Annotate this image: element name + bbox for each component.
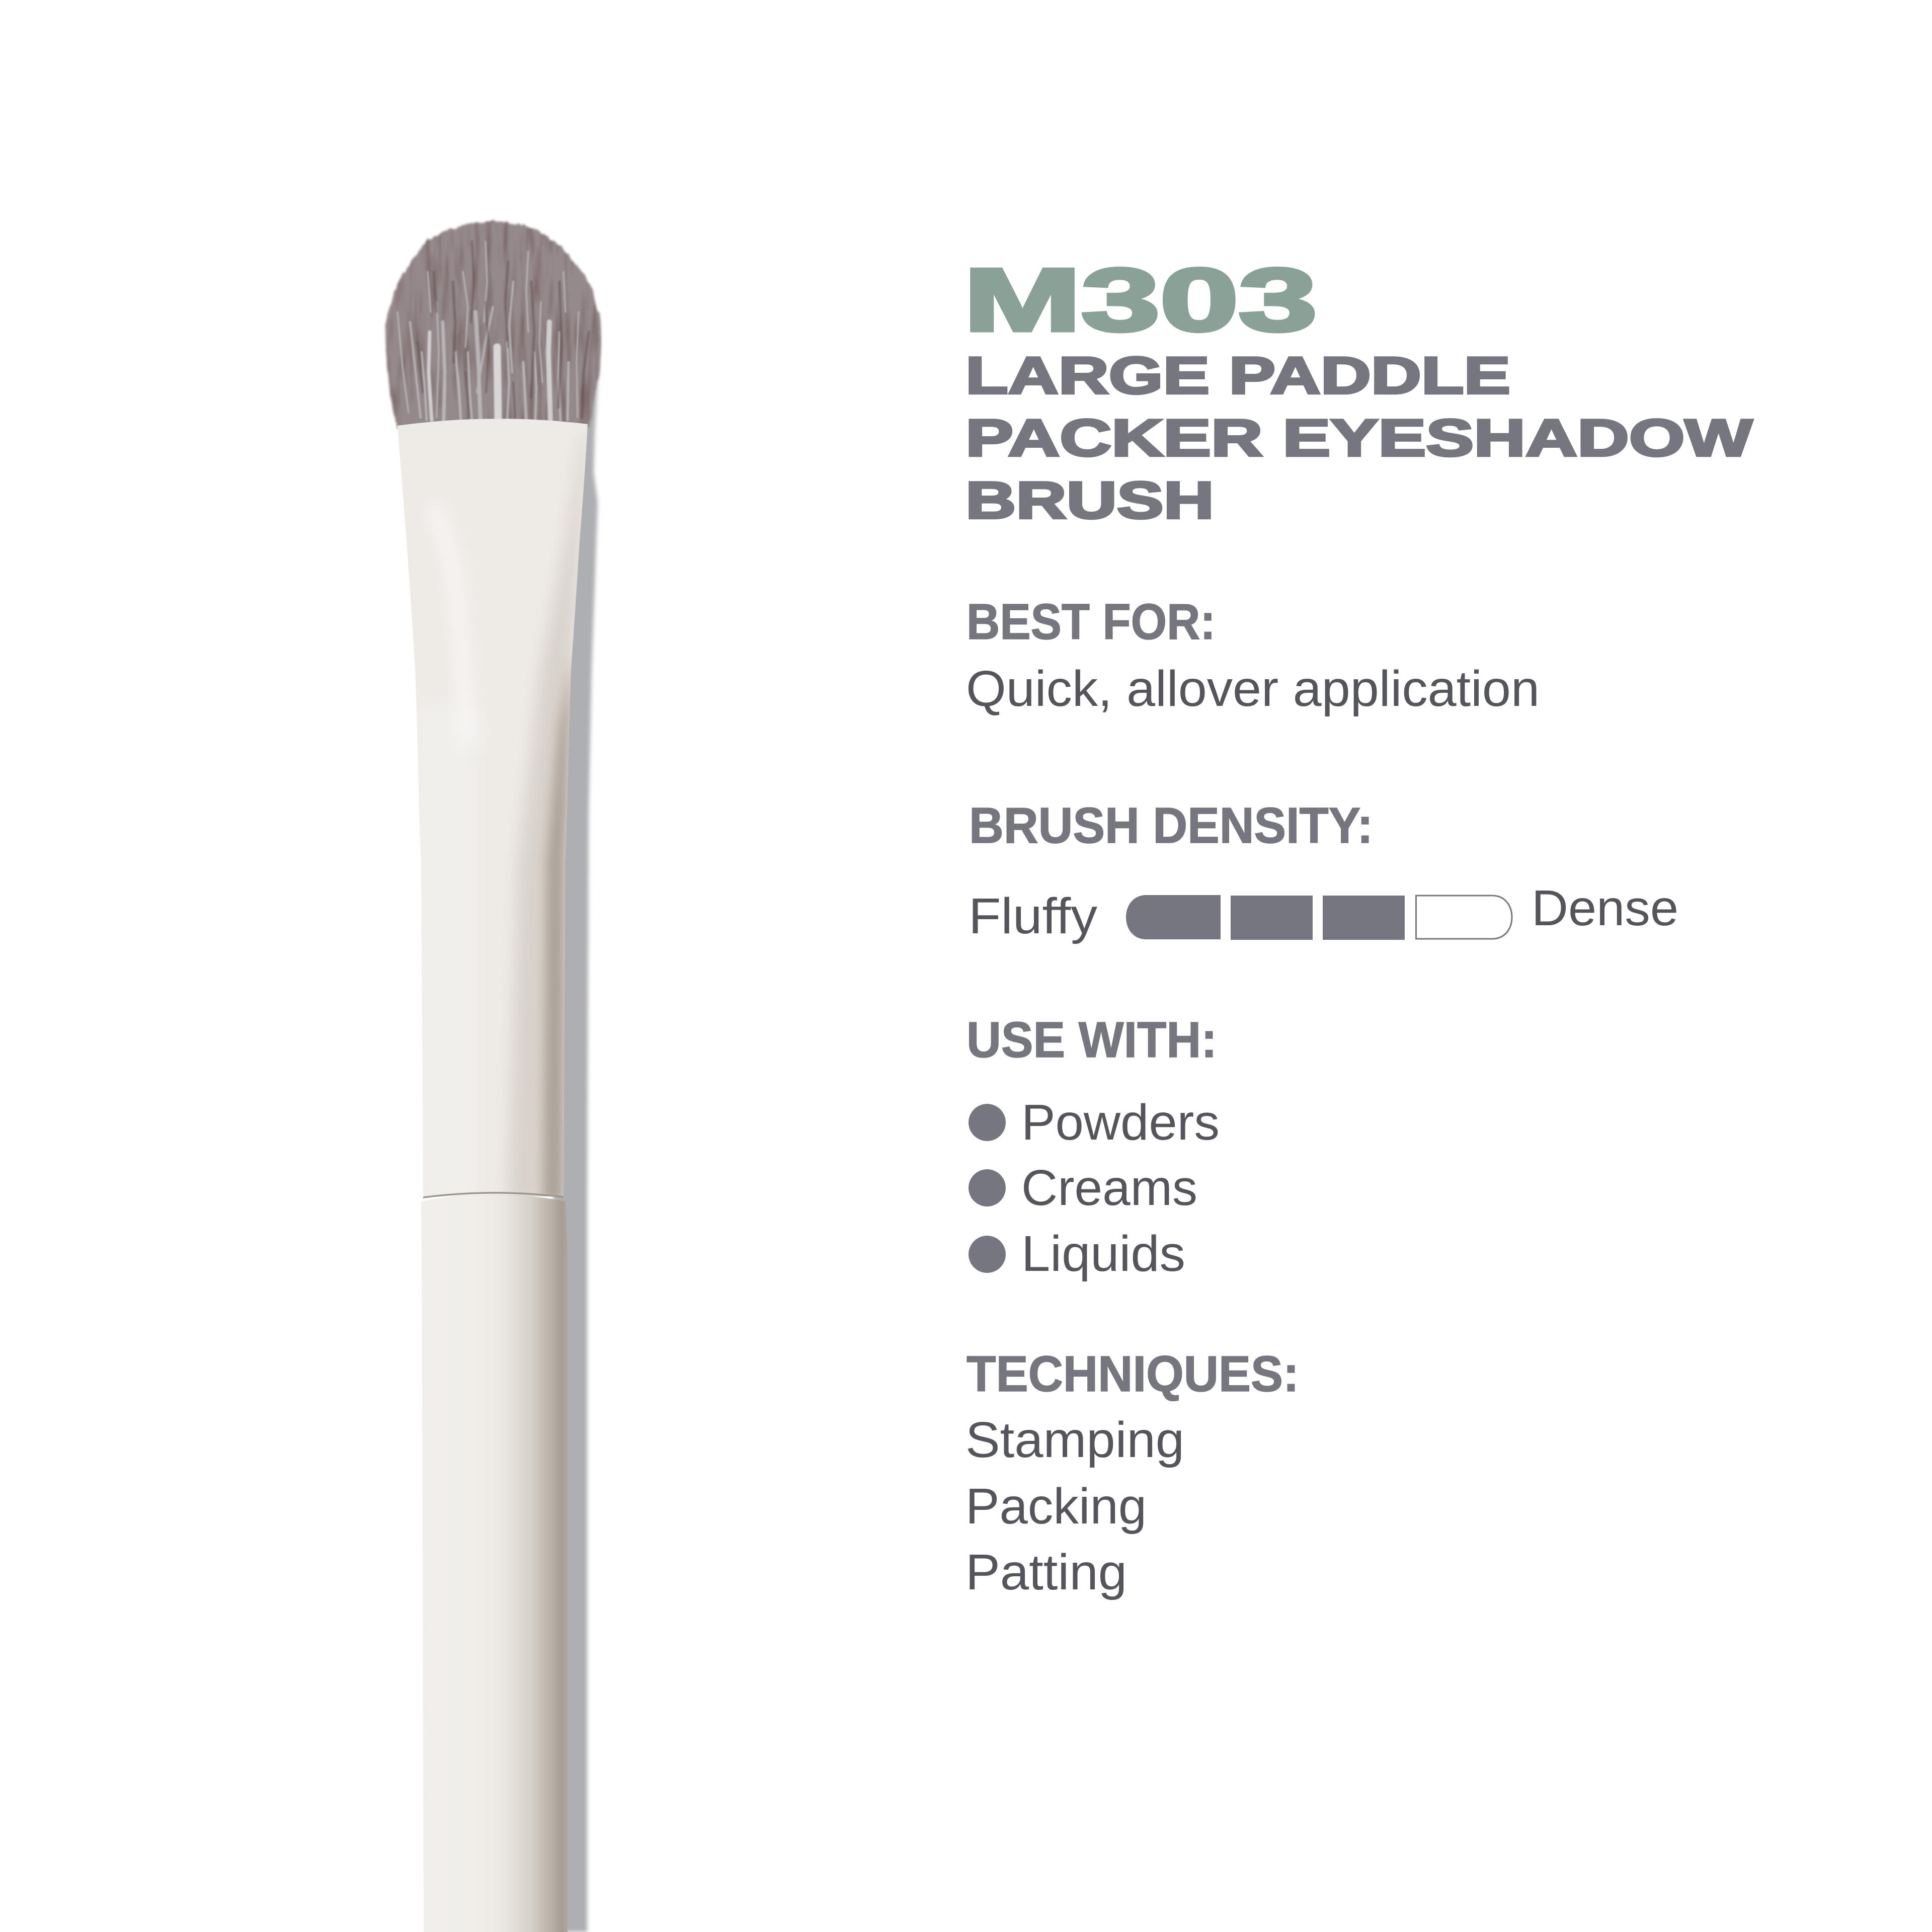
product code: M303 (963, 250, 1317, 350)
bristle highlight strands (397, 242, 579, 420)
infographic canvas (383, 218, 1754, 1932)
product title block (963, 250, 1753, 530)
use with section (967, 1012, 1220, 1282)
brush density section (969, 797, 1678, 944)
item: creams: Creams (1021, 1160, 1197, 1216)
brush handle lower section (421, 1193, 568, 1932)
item: liquids: Liquids (1021, 1226, 1185, 1282)
product name (965, 347, 1753, 530)
product name: BRUSH (965, 471, 1214, 530)
product name: PACKER EYESHADOW (965, 409, 1753, 467)
ferrule mid shade (508, 433, 588, 1202)
best for section: BEST FOR: (967, 594, 1216, 650)
techniques heading: TECHNIQUES: (967, 1346, 1299, 1402)
use with heading: USE WITH: (967, 1012, 1217, 1068)
techniques list (965, 1412, 1184, 1600)
ferrule edge shade (543, 654, 572, 1202)
ferrule highlight (432, 503, 468, 745)
product name: LARGE PADDLE (965, 347, 1510, 405)
brush illustration (386, 221, 601, 1932)
brush bristles (386, 221, 601, 428)
techniques section (965, 1346, 1299, 1600)
density heading: BRUSH DENSITY: (969, 797, 1373, 854)
handle seam (423, 1193, 564, 1197)
techniques list: Packing (965, 1478, 1147, 1535)
best for section: Quick, allover application (966, 661, 1540, 717)
label: dense: Dense (1532, 880, 1678, 936)
best for section (966, 594, 1540, 717)
item: powders: Powders (1021, 1094, 1220, 1151)
brush cast shadow (553, 362, 599, 1932)
bristle dark strands (418, 242, 589, 418)
techniques list: Patting (965, 1544, 1127, 1600)
ferrule left shade (413, 704, 478, 1202)
techniques list: Stamping (965, 1412, 1184, 1468)
brush ferrule (392, 413, 594, 1202)
density meter (1126, 895, 1512, 940)
label: fluffy: Fluffy (969, 888, 1097, 944)
